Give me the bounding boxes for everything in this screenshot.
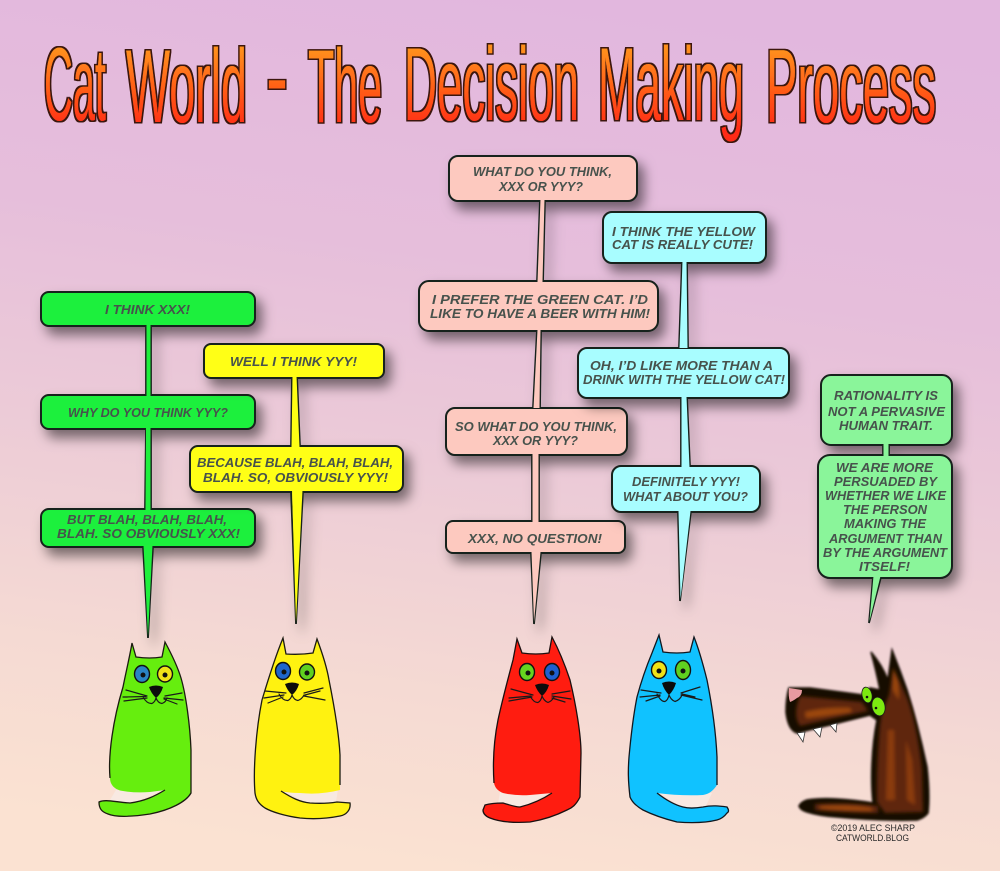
title: Cat (44, 27, 106, 143)
bubble text: I prefer the green cat: LIKE TO HAVE A BEER WITH HIM! (430, 306, 651, 321)
dog fur (796, 668, 923, 813)
title (44, 19, 936, 145)
bubble text: we are more persuaded: BY THE ARGUMENT (823, 545, 948, 560)
bubble text: but blah (57, 512, 241, 541)
bubble text: rationality: HUMAN TRAIT. (839, 418, 933, 433)
dog nose (789, 688, 802, 702)
icon: yellow cat (254, 638, 350, 819)
speech column: blue cat (578, 212, 789, 601)
bubble text: we are more persuaded (823, 460, 948, 574)
bubble text: I think the yellow cat (612, 224, 757, 252)
bubble text: what do you think (473, 164, 612, 194)
dog eyes (860, 686, 874, 704)
bubble text: but blah: BUT BLAH, BLAH, BLAH, (67, 512, 227, 527)
bubble text: so what do you think: XXX OR YYY? (492, 433, 578, 448)
bubble text: I think xxx: I THINK XXX! (105, 302, 191, 317)
bubble text: definitely yyy: WHAT ABOUT YOU? (623, 489, 748, 504)
title: Making (598, 27, 744, 143)
bubble text: but blah: BLAH. SO OBVIOUSLY XXX! (57, 526, 241, 541)
bubble text: rationality (828, 388, 945, 433)
bubble text: oh I'd like more (583, 358, 786, 387)
bubble text: I prefer the green cat (430, 292, 651, 321)
title: World (126, 29, 247, 145)
bubble text: rationality: NOT A PERVASIVE (828, 404, 945, 419)
dog body edge (786, 650, 929, 820)
bubble text: definitely yyy: DEFINITELY YYY! (632, 474, 741, 489)
bubble text: so what do you think: SO WHAT DO YOU THINK, (455, 419, 617, 434)
credit: CATWORLD.BLOG (836, 833, 909, 844)
credit (831, 823, 915, 844)
icon: blue cat (628, 635, 728, 823)
bubble text: rationality: RATIONALITY IS (834, 388, 938, 403)
bubble text: so what do you think (455, 419, 617, 448)
bubble text: I think the yellow cat: I THINK THE YELLOW (612, 224, 757, 239)
icon: green cat (99, 642, 191, 816)
bubble text: we are more persuaded: MAKING THE (844, 516, 926, 531)
bubble text: because blah (197, 455, 393, 485)
dog teeth (797, 723, 837, 742)
title: The (308, 29, 382, 145)
bubble text: we are more persuaded: ARGUMENT THAN (828, 531, 943, 546)
bubble text: what do you think: WHAT DO YOU THINK, (473, 164, 612, 179)
bubble text: xxx no question: XXX, NO QUESTION! (467, 531, 603, 546)
bubble text: because blah: BECAUSE BLAH, BLAH, BLAH, (197, 455, 393, 470)
bubble text: I think the yellow cat: CAT IS REALLY CUTE! (612, 237, 754, 252)
bubble text: we are more persuaded: THE PERSON (843, 502, 928, 517)
bubble text: because blah: BLAH. SO, OBVIOUSLY YYY! (203, 470, 389, 485)
bubble text: we are more persuaded: WE ARE MORE (836, 460, 933, 475)
speech column: green cat (41, 292, 255, 638)
bubble text: well I think yyy: WELL I THINK YYY! (230, 354, 358, 369)
bubble text: oh I'd like more: DRINK WITH THE YELLOW CAT! (583, 372, 786, 387)
speech column: red cat (419, 156, 658, 624)
bubble text: why do you think yyy: WHY DO YOU THINK YYY? (68, 405, 228, 420)
bubble text: I prefer the green cat: I PREFER THE GREEN CAT. I’D (432, 292, 649, 307)
bubble text: we are more persuaded: ITSELF! (859, 559, 911, 574)
speech column: yellow cat (190, 344, 403, 624)
title: - (266, 19, 288, 135)
icon: brown dog (786, 650, 929, 820)
icon: red cat (483, 637, 581, 822)
bubble text: definitely yyy (623, 474, 748, 504)
bubble text: oh I'd like more: OH, I’D LIKE MORE THAN A (590, 358, 773, 373)
speech column: dog (818, 375, 952, 623)
bubble text: we are more persuaded: WHETHER WE LIKE (825, 488, 946, 503)
title: Decision (404, 27, 579, 143)
bubble text: what do you think: XXX OR YYY? (498, 179, 583, 194)
bubble text: we are more persuaded: PERSUADED BY (834, 474, 938, 489)
credit: ©2019 ALEC SHARP (831, 823, 915, 834)
